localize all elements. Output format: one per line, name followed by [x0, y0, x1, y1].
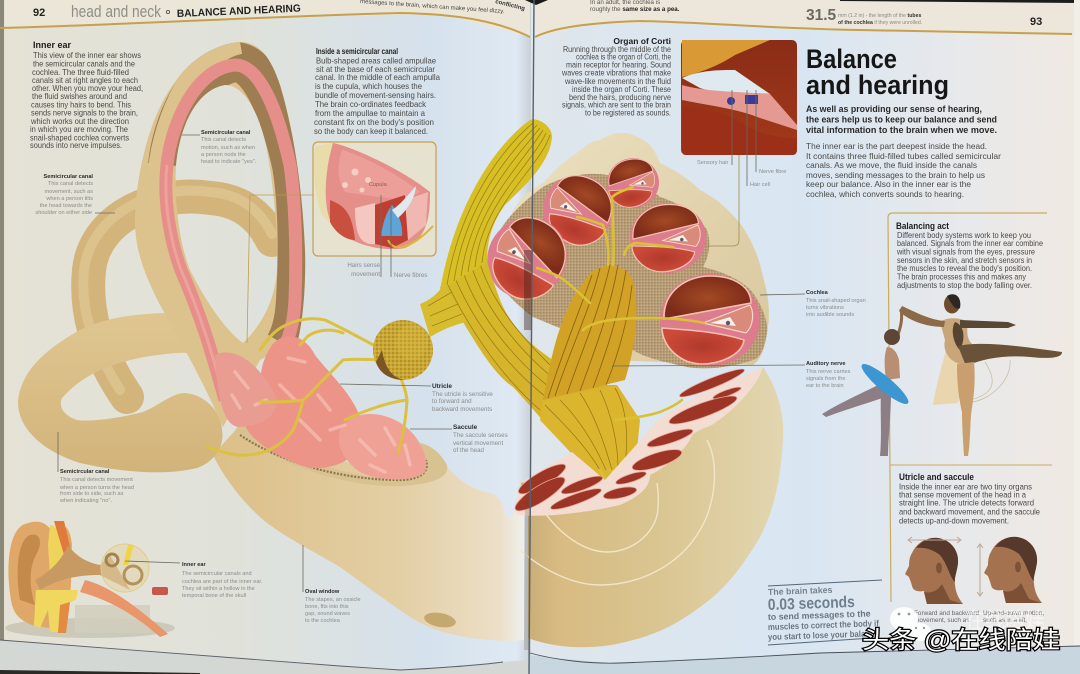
text block: inner ear: canals sit at right angles to each [32, 75, 138, 85]
head captions [914, 610, 1044, 624]
text block: inner ear: other. When you move your head, [32, 83, 143, 93]
text block: organ of Corti: wave-like movements in the fluid [564, 76, 671, 86]
watermark [862, 607, 1060, 654]
text block: balancing act: balanced. Signals from the inner ear combine [897, 238, 1043, 248]
text block: inside a semicircular canal [314, 46, 440, 136]
labels: hairs sense movement, nerve fibres [347, 195, 427, 279]
label: auditory nerve: ear to the brain [806, 383, 844, 389]
label: inner ear (small): They sit within a hollow in the [182, 586, 255, 592]
label: semicircular canal (left): shoulder on either side [35, 210, 92, 216]
text block: inner ear: the semicircular canals and the [33, 58, 135, 68]
text block: inner ear: sends nerve signals to the brain, [31, 108, 138, 118]
text block: inner ear: which works out the direction [30, 116, 129, 126]
text block: balancing act [896, 221, 1043, 290]
cochlear turn cross-sections [471, 155, 760, 366]
labels: hairs sense movement, nerve fibres: Hairs sense [347, 262, 381, 269]
label: inner ear (small): The semicircular canals and [182, 571, 252, 577]
text block: inner ear: cochlea. The three fluid-filled [32, 67, 129, 77]
label: oval window: Oval window [305, 589, 340, 595]
labels: hairs sense movement, nerve fibres: Nerve fibres [394, 272, 427, 279]
text block: organ of Corti: signals, which are sent to the brain [562, 100, 671, 110]
text block: inner ear: in which you are moving. The [30, 124, 128, 134]
head captions: Forward and backward [914, 610, 979, 617]
intro text [806, 104, 997, 136]
text block: inner ear: the fluid swishes around and [32, 91, 127, 101]
text block: inner ear: This view of the inner ear shows [33, 50, 141, 60]
text block: inside a semicircular canal: bundle of movement-sensing hairs. [315, 90, 436, 100]
label: oval window [303, 545, 361, 624]
label: cochlea: turns vibrations [806, 305, 844, 311]
fact callout: 0.03 seconds: muscles to correct the body if [768, 618, 879, 632]
text block: organ of Corti: to be registered as sounds. [585, 108, 671, 118]
head captions: movement, such as [914, 617, 969, 624]
label: semicircular canal (top): motion, such as when [201, 145, 255, 151]
text block: utricle and saccule [899, 472, 1040, 526]
gutter fold shadow [524, 0, 534, 674]
body text: moves, sending messages to the brain to help us [806, 170, 985, 180]
lower cochlea cut surface with red turns [511, 365, 763, 516]
labels: hairs sense movement, nerve fibres: movement [351, 271, 380, 278]
label: semicircular canal (bottom): This canal detects movement [60, 477, 133, 483]
text block: balancing act: with visual signals from the eyes, pressure [896, 246, 1035, 256]
label: semicircular canal (bottom): Semicircular canal [60, 469, 110, 475]
text block: inside a semicircular canal: from the ampullae to maintain a [315, 108, 425, 118]
oval window dimple [423, 610, 457, 630]
label: semicircular canal (left): the head towards the [40, 203, 92, 209]
text block: inside a semicircular canal: Inside a semicircular canal [316, 46, 398, 56]
body text [806, 141, 1001, 199]
text block: inside a semicircular canal: Bulb-shaped areas called ampullae [316, 56, 436, 66]
upper cochlea outer bone [507, 133, 769, 365]
anatomy illustration: inner ear [18, 42, 783, 647]
label: semicircular canal (left): when a person tilts [45, 196, 93, 202]
text block: utricle and saccule: Utricle and saccule [899, 472, 974, 483]
label: semicircular canal (bottom): from side to side, such as [60, 491, 124, 497]
label: cochlea: into audible sounds [806, 312, 854, 318]
illustration: outer and middle ear [5, 521, 175, 638]
head captions: Up-and-down motion, [983, 610, 1044, 617]
leader: organ of Corti to cochlea [707, 155, 739, 246]
text block: organ of Corti: bend the hairs, producing nerve [569, 92, 671, 102]
header band left [5, 0, 530, 37]
page header right [590, 0, 1042, 28]
fact callout: 0.03 seconds: to send messages to the [768, 608, 871, 622]
upper nerve band [440, 119, 552, 290]
label: semicircular canal (left): movement, such as [44, 189, 93, 195]
text block: utricle and saccule: detects up-and-down movement. [899, 516, 1009, 526]
text block: inside a semicircular canal: canal. In the middle of each ampulla [315, 72, 440, 82]
photo: two ballet dancers [822, 294, 1062, 456]
text block: organ of Corti: Organ of Corti [613, 36, 671, 46]
inset: ampulla cross-section: Cupula [369, 182, 388, 188]
label: inner ear (small) [125, 561, 263, 599]
bone body [213, 425, 524, 641]
label: inner ear (small): temporal bone of the skull [182, 593, 246, 599]
text block: inner ear: sounds into nerve impulses. [30, 140, 122, 150]
page header left: BALANCE AND HEARING [177, 3, 301, 20]
labels: organ of Corti parts: Sensory hair [697, 160, 729, 166]
text block: organ of Corti: inside the organ of Corti. These [572, 84, 671, 94]
labels: organ of Corti parts: Nerve fibre [759, 169, 786, 175]
text block: inner ear: causes tiny hairs to bend. This [31, 100, 131, 110]
title: and hearing [806, 70, 949, 100]
lower cochlea body [528, 367, 783, 647]
semicircular canal ring (lateral with bulb) [18, 313, 223, 472]
labels: organ of Corti parts [697, 90, 786, 188]
body text: cochlea, which converts sounds to hearing. [806, 189, 964, 199]
photo: head showing forward and backward motion [905, 537, 963, 604]
body text: The inner ear is the part deepest inside the head. [806, 141, 987, 151]
text block: inside a semicircular canal: sit at the base of each semicircular [316, 64, 435, 74]
lower vestibulocochlear band [440, 260, 640, 470]
text block: balancing act: The brain processes this and makes any [897, 272, 1027, 282]
inset: organ of Corti [681, 40, 797, 155]
page header right: 93 [1030, 16, 1042, 28]
fact callout: 0.03 seconds: you start to lose your balance [768, 628, 879, 642]
page header left: 92 [33, 7, 45, 19]
label: utricle: to forward and [432, 398, 472, 405]
modiolus speckled core [490, 174, 767, 368]
label: inner ear (small): cochlea are part of the inner ear. [182, 579, 263, 585]
label: auditory nerve [612, 361, 851, 389]
label: saccule: of the head [453, 447, 485, 454]
panel frame: balancing act [888, 213, 1047, 602]
page header left: head and neck [71, 3, 162, 21]
gold header rule right [535, 21, 1072, 37]
labels: organ of Corti parts: Hair cell [750, 182, 770, 188]
head captions: such as in a lift, [983, 617, 1027, 624]
label: semicircular canal (top): head to indicate "yes". [201, 159, 257, 165]
label: semicircular canal (bottom): when a person turns the head [59, 485, 134, 491]
label: saccule: vertical movement [453, 440, 503, 447]
adult dancer [899, 294, 1062, 456]
label: utricle: Utricle [432, 383, 452, 390]
text block: inside a semicircular canal: is the cupula, which houses the [315, 81, 422, 91]
label: oval window: bone, fits into this [305, 604, 349, 610]
label: auditory nerve: Auditory nerve [806, 361, 845, 367]
page header right: mm (1.2 in) - the length of the tubes [838, 13, 921, 19]
label: semicircular canal (top): Semicircular canal [201, 130, 251, 136]
intro text: vital information to the brain when we move. [806, 125, 997, 136]
text block: organ of Corti: main receptor for hearing. Sound [566, 60, 671, 70]
left page background [0, 0, 533, 674]
watermark: 头条 @在线陪娃 [862, 627, 1060, 654]
text block: utricle and saccule: that sense movement of the head in a [899, 490, 1026, 500]
label: semicircular canal (left) [35, 174, 115, 216]
text block: utricle and saccule: and backward movement, and the saccule [899, 506, 1040, 516]
text block: utricle and saccule: straight line. The utricle detects forward [899, 498, 1034, 508]
page header right: of the cochlea if they were unrolled. [838, 20, 922, 26]
label: saccule [410, 424, 508, 454]
label: cochlea: Cochlea [806, 290, 829, 296]
text block: organ of Corti: cochlea is the organ of Corti, the [576, 52, 671, 62]
body text: keep our balance. Also in the inner ear is the [806, 179, 971, 189]
label: semicircular canal (top): a person nods the [201, 152, 246, 158]
label: saccule: Saccule [453, 424, 478, 431]
gold header rule left [0, 13, 530, 37]
fact callout: 0.03 seconds: 0.03 seconds [768, 594, 855, 614]
child dancer [822, 309, 912, 456]
page header left [33, 0, 526, 21]
divider above utricle and saccule [890, 464, 1052, 466]
text block: inner ear [30, 40, 143, 150]
label: auditory nerve: This nerve carries [806, 369, 851, 375]
label: auditory nerve: signals from the [806, 376, 845, 382]
bone cross-section rim [235, 420, 447, 486]
label: oval window: The stapes, an ossicle [305, 597, 361, 603]
right page background [531, 0, 1080, 674]
header band right [535, 0, 1075, 37]
label: semicircular canal (top): This canal detects [201, 137, 246, 143]
text block: inside a semicircular canal: constant fix on the body's position [314, 117, 434, 127]
text block: balancing act: Different body systems work to keep you [897, 230, 1031, 240]
vertical semicircular canal [135, 42, 305, 427]
text block: inner ear: Inner ear [33, 40, 71, 51]
label: oval window: gap, sound waves [305, 611, 350, 617]
fact callout: 0.03 seconds: The brain takes [768, 585, 833, 597]
text block: balancing act: Balancing act [896, 221, 950, 232]
text block: inside a semicircular canal: The brain co-ordinates feedback [315, 99, 427, 109]
photo: head showing up and down motion [977, 537, 1042, 603]
watermark: 在线陪娃 [965, 608, 1045, 633]
title [806, 44, 949, 100]
vestibular nerve ganglion [373, 284, 466, 380]
label: semicircular canal (bottom): when indicating "no". [59, 498, 112, 504]
cochlea spiral lines [520, 440, 714, 585]
text block: organ of Corti [561, 36, 671, 118]
label: cochlea [760, 290, 866, 318]
title: Balance [806, 44, 897, 74]
text block: balancing act: adjustments to stop the body falling over. [897, 280, 1032, 290]
label: inner ear (small): Inner ear [182, 562, 206, 568]
label: semicircular canal (top) [182, 130, 257, 165]
text block: inside a semicircular canal: so the body can keep it balanced. [314, 126, 428, 136]
nerve fibres to the upper turns [522, 187, 704, 487]
text block: balancing act: the muscles to reveal the body's position. [897, 263, 1032, 273]
label: semicircular canal (left): Semicircular canal [44, 174, 93, 180]
vestibular nerve branches [207, 319, 407, 455]
label: oval window: to the cochlea [305, 618, 341, 624]
gold cochlear nerve bundle [543, 265, 636, 400]
nerve fan to the lower turns [540, 385, 640, 482]
leader: ampulla inset from canal [247, 195, 313, 343]
text block: utricle and saccule: Inside the inner ear are two tiny organs [899, 482, 1032, 492]
label: utricle [340, 383, 493, 413]
label: saccule: The saccule senses [453, 432, 508, 439]
label: utricle: backward movements [432, 406, 492, 413]
body text: canals. As we move, the fluid inside the canals [806, 160, 977, 170]
intro text: the ears help us to keep our balance and send [806, 114, 997, 126]
label: semicircular canal (left): This canal detects [48, 181, 93, 187]
text block: inner ear: snail-shaped cochlea converts [30, 132, 129, 142]
text block: balancing act: sensors in the skin, and stretch sensors in [897, 255, 1032, 265]
label: semicircular canal (bottom) [58, 432, 134, 504]
label: cochlea: This snail-shaped organ [806, 298, 866, 304]
page header right: roughly the same size as a pea. [590, 6, 680, 13]
page header right: 31.5 [806, 7, 837, 24]
text block: organ of Corti: waves create vibrations that make [561, 68, 671, 78]
inset: ampulla cross-section [313, 142, 436, 256]
pink ampulla, utricle and saccule [215, 336, 426, 480]
body text: It contains three fluid-filled tubes called semicircular [806, 151, 1001, 161]
semicircular canal ring (upper) [83, 191, 272, 397]
label: utricle: The utricle is sensitive [432, 391, 493, 398]
fact callout: 0.03 seconds [768, 580, 882, 645]
intro text: As well as providing our sense of hearing, [806, 104, 982, 115]
text block: organ of Corti: Running through the middle of the [563, 44, 671, 54]
